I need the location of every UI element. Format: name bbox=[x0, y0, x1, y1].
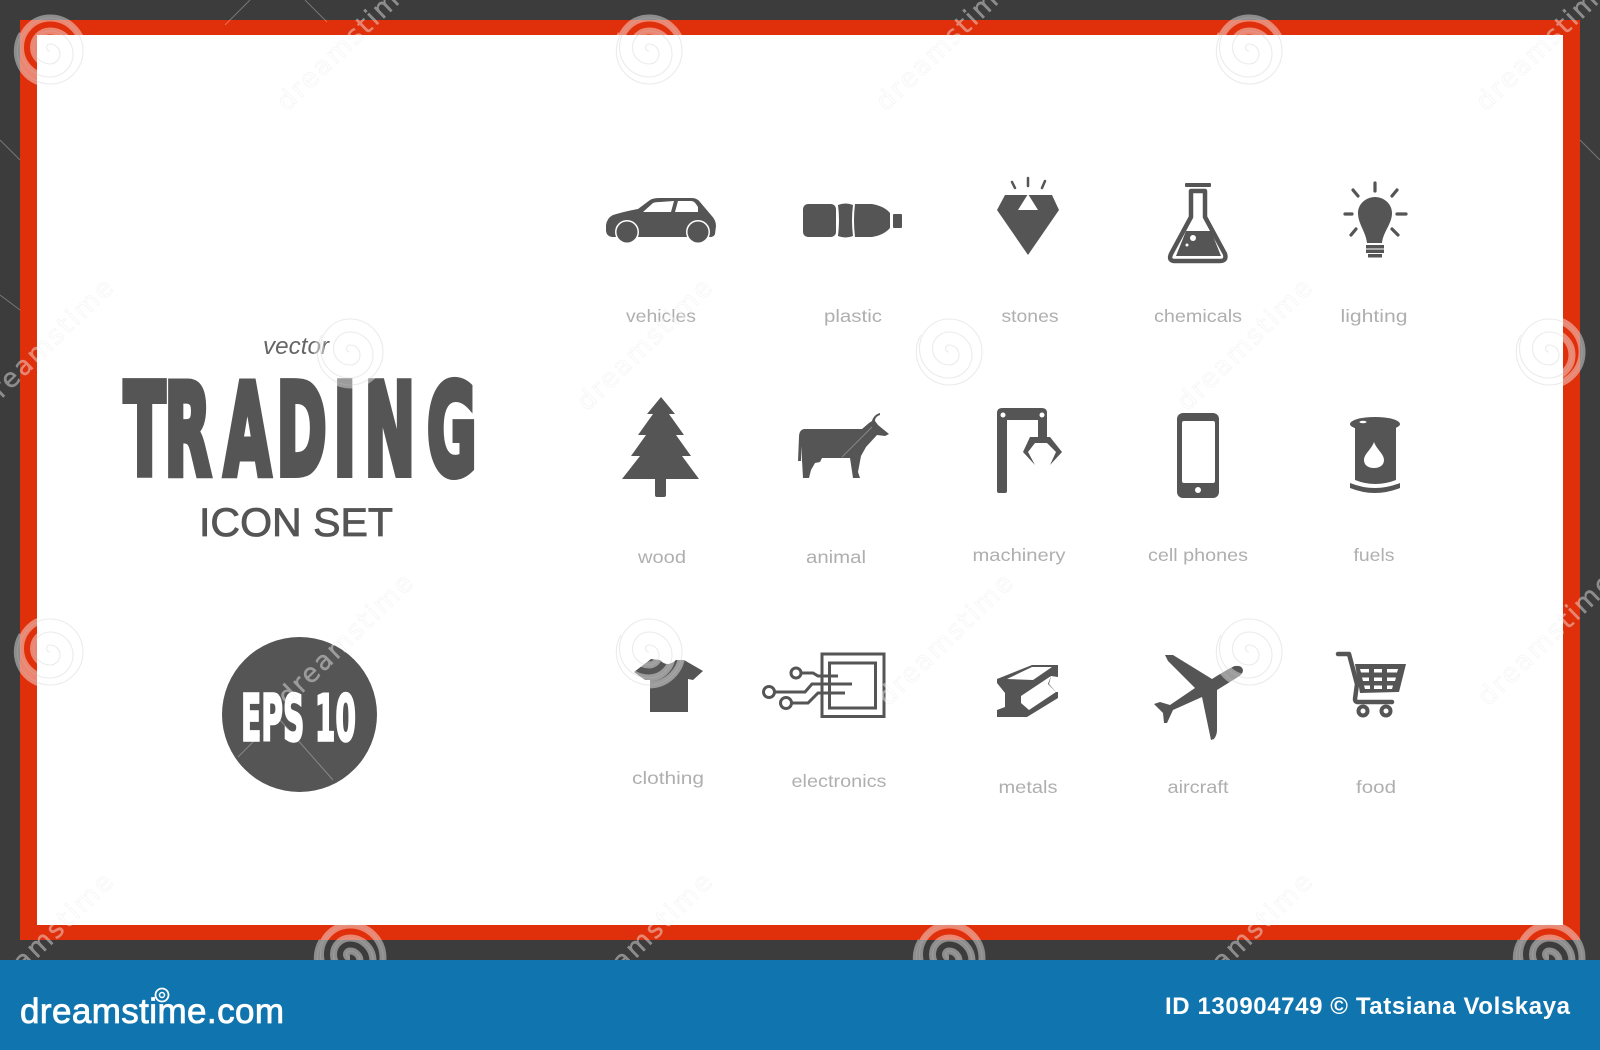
label: lighting: lighting bbox=[1340, 306, 1408, 326]
icon: cow (animal) bbox=[798, 413, 889, 478]
badge: EPS 10: EPS 10 bbox=[241, 681, 356, 756]
footer bar bbox=[0, 960, 1600, 1050]
watermark overlay: spirals and diagonal dreamstime text: dreamstime bbox=[272, 568, 419, 712]
icon: smartphone (cell phones) bbox=[1177, 413, 1219, 498]
label: fuels: fuels bbox=[1354, 545, 1395, 565]
heading block: vector trading icon set bbox=[124, 333, 477, 545]
label: animal: animal bbox=[806, 547, 866, 567]
icon: fuel can (fuels) bbox=[1350, 417, 1400, 493]
main title: TRADING: TRADING bbox=[124, 358, 477, 505]
label: chemicals: chemicals bbox=[1154, 306, 1242, 326]
subtitle: ICON SET: ICON SET bbox=[199, 501, 393, 545]
label: wood: wood bbox=[637, 547, 686, 567]
icon: light bulb (lighting) bbox=[1345, 183, 1406, 258]
label: electronics: electronics bbox=[792, 771, 887, 791]
watermark overlay: spirals and diagonal dreamstime text: dreamstime bbox=[571, 273, 718, 417]
label: vehicles: vehicles bbox=[626, 306, 696, 326]
badge: EPS 10 bbox=[222, 637, 377, 792]
icon: t-shirt (clothing) bbox=[634, 659, 703, 712]
small heading: vector: vector bbox=[263, 333, 330, 360]
label: plastic: plastic bbox=[824, 306, 882, 326]
icon: robotic claw (machinery) bbox=[997, 408, 1062, 493]
icon: circuit chip (electronics) bbox=[764, 654, 884, 716]
watermark overlay: spirals and diagonal dreamstime text: dreamstime bbox=[1171, 273, 1318, 417]
watermark overlay: spirals and diagonal dreamstime text: dreamstime bbox=[1171, 867, 1318, 1011]
watermark overlay: spirals and diagonal dreamstime text: dreamstime bbox=[571, 867, 718, 1011]
icon: diamond (stones) bbox=[997, 178, 1059, 255]
label: clothing: clothing bbox=[632, 768, 704, 788]
icon: flask (chemicals) bbox=[1170, 183, 1225, 261]
footer credit: image ID and author: ID 130904749 © Tatsiana Volskaya bbox=[1165, 993, 1571, 1020]
footer logo: dreamstime.com: dreamstime.com bbox=[20, 992, 284, 1031]
watermark overlay: spirals and diagonal dreamstime text: dreamstime bbox=[872, 568, 1019, 712]
icon: steel beam (metals) bbox=[997, 665, 1058, 717]
icon: fir tree (wood) bbox=[622, 397, 699, 497]
label: stones: stones bbox=[1002, 306, 1059, 326]
label: food: food bbox=[1356, 777, 1396, 797]
icon: shopping cart (food) bbox=[1338, 654, 1406, 716]
icon: bottle (plastic) bbox=[803, 204, 902, 238]
label: aircraft: aircraft bbox=[1168, 777, 1229, 797]
icon: car (vehicles) bbox=[606, 198, 716, 244]
icon: airplane (aircraft) bbox=[1154, 655, 1243, 740]
label: machinery: machinery bbox=[972, 545, 1066, 565]
label: cell phones: cell phones bbox=[1148, 545, 1248, 565]
label: metals: metals bbox=[998, 777, 1058, 797]
